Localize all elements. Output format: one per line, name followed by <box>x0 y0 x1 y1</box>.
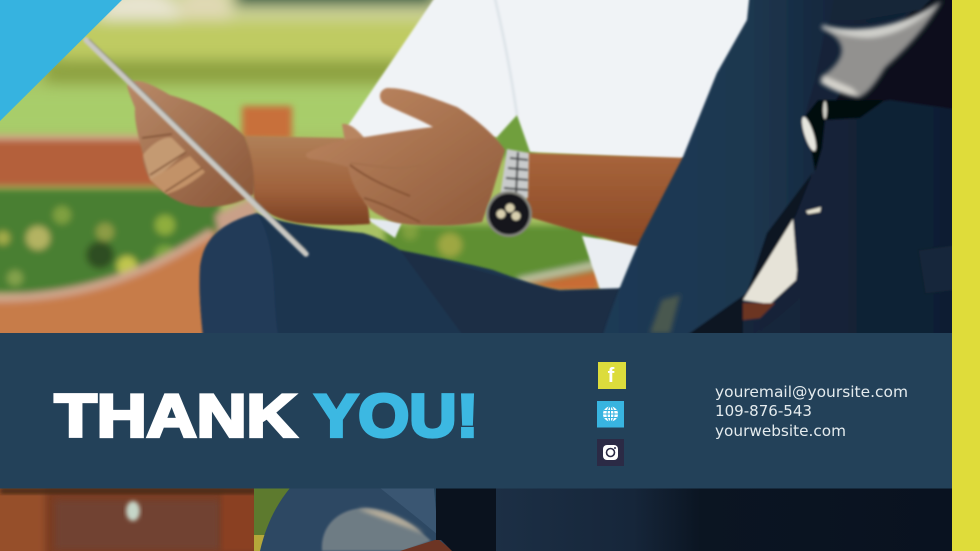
icon: facebook: f <box>608 365 615 387</box>
near forearm <box>245 136 370 225</box>
icon: globe <box>597 401 624 428</box>
email: youremail@yoursite.com <box>715 383 908 401</box>
pointing hand <box>306 88 505 226</box>
trousers of man with tablet <box>200 213 625 345</box>
wrist watch <box>486 149 532 237</box>
heading: thank you: THANK <box>54 382 296 450</box>
corner triangle <box>0 0 122 121</box>
white shirt <box>345 0 770 292</box>
website: yourwebsite.com <box>715 422 846 440</box>
contact details <box>715 383 908 440</box>
tablet <box>86 39 306 254</box>
photo continuation below panel <box>0 480 952 551</box>
photo background: blurred garden and bench <box>0 0 980 345</box>
icon: instagram <box>597 439 624 466</box>
dark suit of man in foreground <box>600 0 960 345</box>
phone: 109-876-543 <box>715 402 812 420</box>
hand holding tablet <box>127 81 254 207</box>
accent stripe <box>952 0 980 551</box>
contact panel <box>0 333 952 488</box>
photo: two men talking with a tablet <box>0 0 980 345</box>
far forearm <box>526 153 690 247</box>
heading: you: YOU! <box>314 382 478 450</box>
icon: facebook <box>598 362 626 389</box>
